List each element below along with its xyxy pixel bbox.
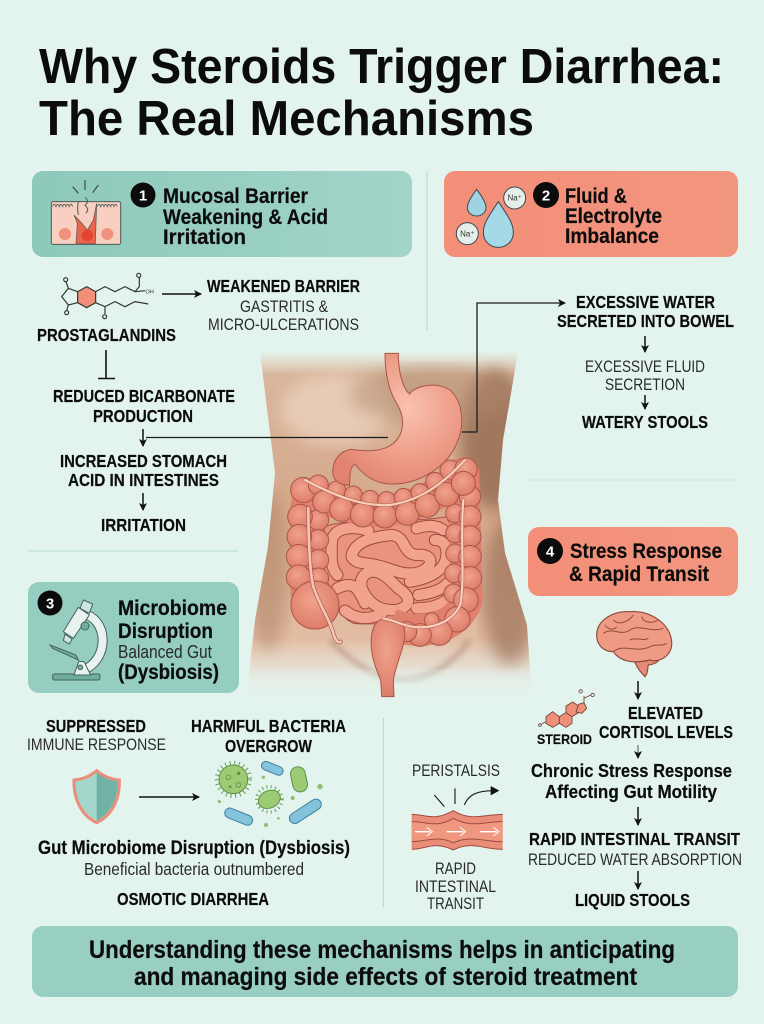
text: increased stomach acid: INCREASED STOMACH [60,451,227,471]
text: rapid intestinal transit [528,829,742,869]
text: suppressed immune response [27,716,166,754]
panel 3: microbiome disruption [28,582,239,693]
text: liquid stools: LIQUID STOOLS [575,890,690,910]
text: suppressed immune response: SUPPRESSED [46,716,146,736]
badge 3: 3 [46,596,54,612]
section 3 flow [27,716,350,909]
label: rapid intestinal transit: INTESTINAL [415,878,496,896]
icon: damaged cells [51,180,121,244]
stomach [333,353,462,485]
icon: steroid molecule [539,690,594,727]
central anatomy illustration [240,350,540,702]
organs [286,353,482,697]
text: reduced bicarbonate [53,386,235,426]
icon: prostaglandin molecule: OH [145,289,154,295]
icon: droplets and sodium: Na⁺ [507,194,522,203]
title: The Real Mechanisms [39,91,534,146]
heading 3: Balanced Gut [118,642,212,662]
text: increased stomach acid [60,451,227,490]
heading 3: Disruption [118,620,213,643]
section 2 flow [557,292,734,432]
connector lines from stomach [146,303,565,438]
text: weakened barrier: MICRO-ULCERATIONS [208,315,359,334]
text: gut microbiome disruption: Gut Microbiome Disruption (Dysbiosis) [38,838,350,859]
text: excessive water: EXCESSIVE WATER [576,292,715,312]
arrow [644,336,646,352]
text: harmful bacteria: HARMFUL BACTERIA [191,716,346,736]
title [39,39,724,146]
heading 2: Electrolyte [565,205,662,228]
icon: shield [74,771,119,823]
small intestine [323,517,453,624]
footer banner: and managing side effects of steroid treatment [134,963,638,991]
heading 3 [118,597,227,684]
badge 3 [38,590,62,616]
arrow [139,796,199,798]
label: rapid intestinal transit: TRANSIT [427,895,484,913]
text: excessive water [557,292,734,331]
label: rapid intestinal transit [415,860,496,913]
label: steroid: STEROID [537,731,592,747]
arrow [142,429,144,446]
text: excessive fluid secretion: SECRETION [605,375,685,394]
text: reduced bicarbonate: PRODUCTION [93,406,193,426]
section 1 flow [37,273,360,535]
heading 4 [569,540,722,586]
arrow [637,745,639,758]
badge 1 [130,182,156,208]
heading 1 [163,185,328,249]
badge 1: 1 [139,188,147,204]
text: suppressed immune response: IMMUNE RESPONSE [27,735,166,754]
icon: brain [597,612,672,677]
text: excessive fluid secretion [585,357,705,394]
text: watery stools: WATERY STOOLS [582,412,708,432]
arrow [644,395,646,409]
icon: bacteria cluster [217,760,323,827]
arrow [162,293,201,295]
badge 4: 4 [546,544,555,560]
badge 4 [537,538,563,564]
heading 1: Irritation [163,226,246,249]
text: gut microbiome disruption [38,838,350,879]
text: chronic stress response: Chronic Stress Response [531,760,732,781]
badge 2 [533,182,559,208]
label: prostaglandins: PROSTAGLANDINS [37,325,176,345]
heading 2: Imbalance [565,225,659,248]
heading 1: Mucosal Barrier [163,185,308,208]
title: Why Steroids Trigger Diarrhea: [39,39,724,94]
icon: prostaglandin molecule [62,273,154,319]
text: osmotic diarrhea: OSMOTIC DIARRHEA [117,889,269,909]
rectum [371,618,405,697]
text: weakened barrier: WEAKENED BARRIER [207,276,360,296]
heading 3: (Dysbiosis) [118,661,219,684]
text: excessive water: SECRETED INTO BOWEL [557,311,734,331]
text: harmful bacteria [191,716,346,756]
text: irritation: IRRITATION [101,515,186,535]
text: reduced bicarbonate: REDUCED BICARBONATE [53,386,235,406]
arrow [637,807,639,825]
section 4 flow [528,612,742,910]
badge 2: 2 [542,188,550,204]
arrow [637,871,639,889]
heading 4: Stress Response [570,540,722,563]
label: peristalsis: PERISTALSIS [412,762,500,780]
icon: peristalsis tube [412,786,503,850]
taenia bands [305,460,465,642]
text: chronic stress response [531,760,732,802]
text: elevated cortisol levels: ELEVATED [628,703,703,723]
label: rapid intestinal transit: RAPID [435,860,476,878]
panel 2: fluid and electrolyte [444,171,738,257]
torso [248,353,530,684]
heading 2: Fluid & [565,185,627,208]
heading 2 [565,185,662,248]
text: harmful bacteria: OVERGROW [225,736,312,756]
icon: droplets and sodium: Na⁺ [460,229,475,238]
panel 1: mucosal barrier [32,171,412,257]
inhibition bar [98,350,115,378]
arrow [142,493,144,510]
heading 1: Weakening & Acid [163,206,328,229]
icon: microscope [50,600,103,680]
text: elevated cortisol levels [599,703,733,742]
peristalsis diagram [412,762,503,913]
text: weakened barrier: GASTRITIS & [240,297,329,316]
text: weakened barrier [207,276,360,334]
arrow [637,681,639,699]
footer banner: Understanding these mechanisms helps in anticipating [89,936,675,964]
heading 4: & Rapid Transit [569,563,709,586]
text: chronic stress response: Affecting Gut Motility [545,781,718,802]
footer banner [32,926,738,997]
heading 3: Microbiome [118,597,227,620]
text: elevated cortisol levels: CORTISOL LEVELS [599,722,733,742]
text: increased stomach acid: ACID IN INTESTINES [68,470,219,490]
large intestine [286,458,482,697]
panel 4: stress response [528,527,738,596]
text: gut microbiome disruption: Beneficial bacteria outnumbered [84,859,304,879]
icon: droplets and sodium [456,187,526,247]
text: excessive fluid secretion: EXCESSIVE FLUID [585,357,705,376]
